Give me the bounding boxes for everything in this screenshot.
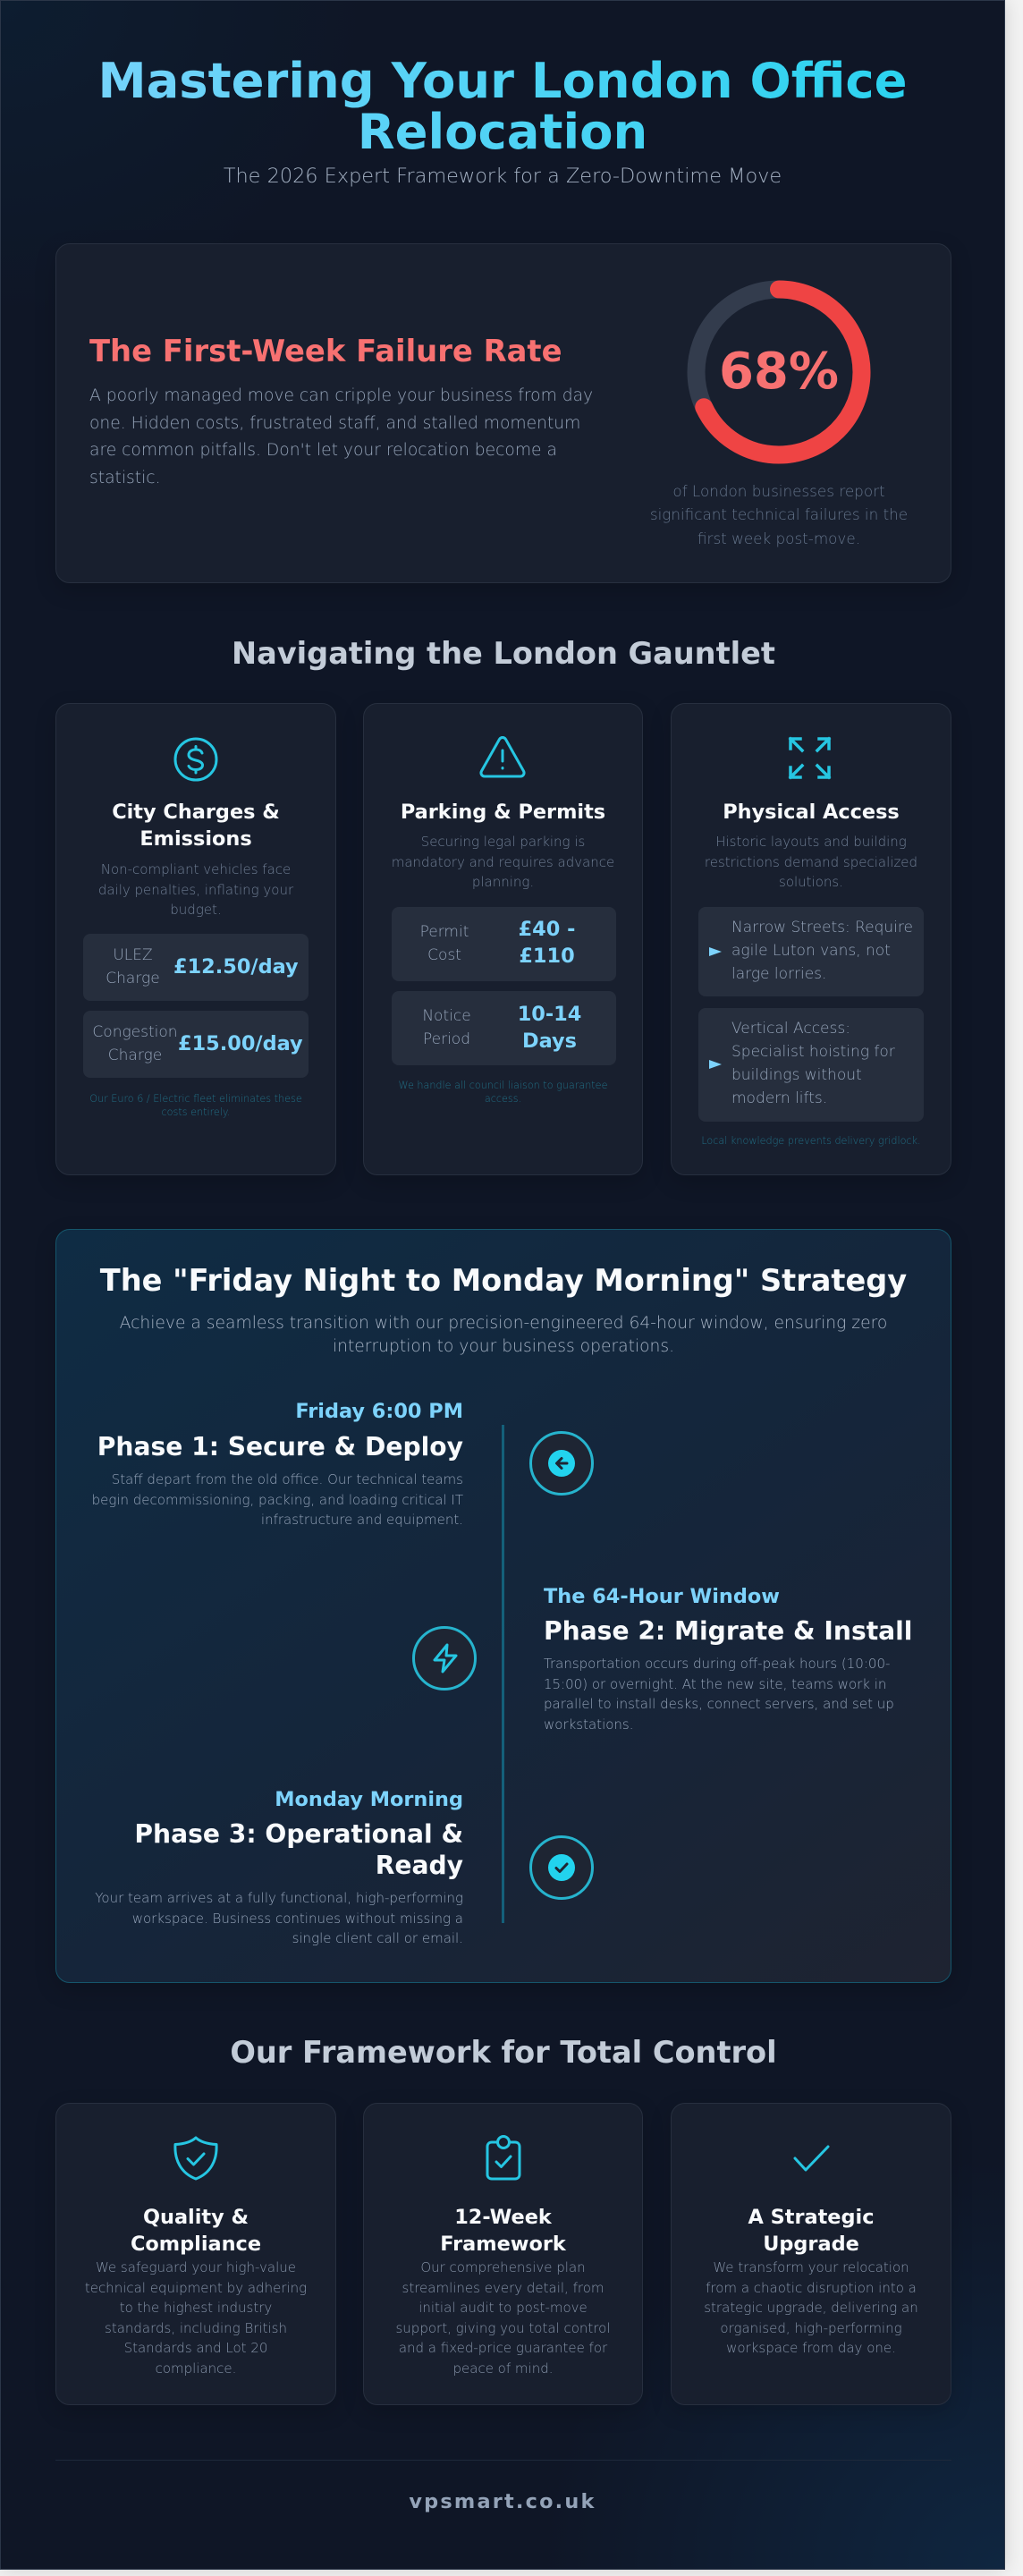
panel: physical access (671, 703, 951, 1175)
subtitle: The 2026 Expert Framework for a Zero-Downtime Move (224, 165, 782, 188)
phase 3 time: Monday Morning (275, 1788, 463, 1811)
card text: Securing legal parking is (421, 834, 585, 850)
footer brand: vpsmart.co.uk (409, 2490, 596, 2513)
title: Relocation (358, 104, 647, 160)
footnote: Local knowledge prevents delivery gridlock. (701, 1135, 921, 1147)
donut caption: significant technical failures in the (650, 505, 908, 523)
panel: Friday to Monday strategy (55, 1229, 951, 1983)
icon: lightning bolt (433, 1644, 458, 1673)
phase 2 text: 15:00) or overnight. At the new site, teams work in (544, 1676, 886, 1692)
strategy text (120, 1314, 887, 1356)
title: Mastering Your London Office (97, 53, 908, 109)
card text: technical equipment by adhering (85, 2280, 307, 2296)
phase 2 time: The 64-Hour Window (544, 1585, 780, 1608)
stat label (92, 1023, 178, 1064)
card text: initial audit to post-move (418, 2300, 588, 2316)
list text (731, 919, 913, 983)
list text: buildings without (731, 1066, 862, 1084)
donut caption: first week post-move. (698, 530, 860, 547)
card heading: A Strategic (748, 2206, 874, 2229)
stat: congestion charge (83, 1011, 309, 1078)
card text: daily penalties, inflating your (98, 882, 293, 898)
icon: dollar coin (173, 737, 218, 782)
card text: organised, high-performing (720, 2320, 902, 2336)
panel: 12-week framework (363, 2103, 643, 2405)
card text: We transform your relocation (713, 2259, 909, 2275)
phase 3 (95, 1788, 594, 1946)
card text: planning. (472, 874, 534, 890)
phase 2 text: workstations. (544, 1716, 634, 1733)
phase 1 (92, 1400, 594, 1528)
stat label: Congestion (92, 1023, 178, 1041)
card heading: 12-Week (454, 2206, 552, 2229)
card heading: Compliance (131, 2233, 261, 2256)
phase 1 text (92, 1471, 463, 1528)
phase 3 text: Your team arrives at a fully functional, high-performing (95, 1890, 463, 1906)
heading: gauntlet: Navigating the London Gauntlet (232, 636, 775, 671)
card text: Standards and Lot 20 (124, 2340, 267, 2356)
stat label: ULEZ (113, 946, 153, 964)
card text: Non-compliant vehicles face (101, 861, 291, 877)
card text (392, 834, 614, 890)
phase 3 heading: Phase 3: Operational & (134, 1819, 463, 1849)
card text (705, 834, 917, 890)
card text: from a chaotic disruption into a (706, 2280, 917, 2296)
hero paragraph: are common pitfalls. Don't let your relocation become a (89, 441, 557, 460)
card heading: Physical Access (723, 801, 900, 824)
card text: and a fixed-price guarantee for (399, 2340, 607, 2356)
strategy text: interruption to your business operations. (333, 1337, 674, 1356)
phase 1 text: Staff depart from the old office. Our technical teams (112, 1471, 463, 1487)
stat value: £15.00/day (178, 1032, 303, 1055)
stat label: Permit (420, 923, 469, 941)
footer divider (55, 2460, 951, 2461)
card text: We safeguard your high-value (96, 2259, 296, 2275)
icon: completion node (529, 1835, 594, 1900)
phase 2 text: parallel to install desks, connect servers, and set up (544, 1696, 894, 1712)
card heading (131, 2206, 261, 2256)
icon: clipboard check (486, 2135, 520, 2181)
icon: arrow in circle (548, 1450, 575, 1477)
list item: narrow streets (698, 907, 924, 996)
list text: Narrow Streets: Require (731, 919, 913, 936)
card heading (672, 2204, 951, 2258)
icon: check mark (793, 2145, 830, 2172)
card heading: Parking & Permits (401, 801, 605, 824)
stat label (422, 1007, 471, 1048)
panel: quality and compliance (55, 2103, 336, 2405)
icon: departure node (529, 1431, 594, 1496)
hero paragraph (89, 386, 593, 487)
phase 3 text: workspace. Business continues without missing a (132, 1911, 463, 1927)
card text: strategic upgrade, delivering an (704, 2300, 918, 2316)
stat value: £40 - (519, 918, 575, 941)
list text: agile Luton vans, not (731, 942, 891, 960)
footnote (399, 1080, 607, 1105)
phase 1 heading: Phase 1: Secure & Deploy (97, 1432, 463, 1462)
stat label: Charge (108, 1046, 162, 1064)
title (1, 55, 1004, 157)
heading: framework: Our Framework for Total Control (230, 2035, 777, 2070)
card heading: Emissions (140, 827, 252, 851)
list text: Specialist hoisting for (731, 1043, 895, 1061)
card text: restrictions demand specialized (705, 854, 917, 870)
panel: parking and permits (363, 703, 643, 1175)
icon: warning triangle (479, 736, 526, 778)
footnote: access. (485, 1093, 521, 1105)
bullet arrow (709, 1060, 722, 1069)
panel: first-week failure rate (55, 243, 951, 583)
icon: lightning node (412, 1626, 477, 1690)
card text: standards, including British (105, 2320, 287, 2336)
phase 3 text (95, 1890, 463, 1946)
list text: large lorries. (731, 965, 826, 983)
card text: compliance. (156, 2360, 236, 2377)
bullet arrow (709, 947, 722, 956)
stat label (106, 946, 160, 987)
footnote: Our Euro 6 / Electric fleet eliminates these (89, 1093, 302, 1105)
stat: permit cost (392, 907, 616, 981)
footnote (89, 1093, 302, 1118)
phase 3 text: single client call or email. (292, 1930, 463, 1946)
list text: Vertical Access: (731, 1020, 850, 1038)
phase 2 (412, 1585, 912, 1733)
phase 1 time: Friday 6:00 PM (295, 1400, 463, 1423)
panel: city charges (55, 703, 336, 1175)
card heading: Framework (440, 2233, 566, 2256)
card text: to the highest industry (120, 2300, 272, 2316)
card heading: Quality & (143, 2206, 249, 2229)
card heading (440, 2206, 567, 2256)
stat: ULEZ charge (83, 934, 309, 1001)
card text: support, giving you total control (395, 2320, 610, 2336)
card text (85, 2259, 307, 2377)
card text (395, 2259, 610, 2377)
stat label: Charge (106, 970, 160, 987)
strategy heading: The "Friday Night to Monday Morning" Strategy (100, 1263, 907, 1298)
hero heading: The First-Week Failure Rate (89, 334, 562, 369)
list text (731, 1020, 895, 1107)
stat value: 10-14 (518, 1003, 581, 1026)
stat value (518, 1003, 581, 1053)
hero paragraph: one. Hidden costs, frustrated staff, and stalled momentum (89, 413, 580, 433)
footnote: We handle all council liaison to guarantee (399, 1080, 607, 1091)
stat label (420, 923, 469, 964)
donut chart: 68% (687, 281, 871, 463)
timeline line (502, 1425, 504, 1923)
stat value (519, 918, 575, 968)
card heading: City Charges & (112, 801, 280, 824)
card heading (112, 801, 280, 851)
stat value: Days (522, 1030, 577, 1053)
card text: Our comprehensive plan (420, 2259, 586, 2275)
panel: strategic upgrade (671, 2103, 951, 2405)
phase 3 heading: Ready (376, 1850, 463, 1880)
stat: notice period (392, 991, 616, 1065)
card text: Historic layouts and building (715, 834, 907, 850)
footnote: costs entirely. (161, 1106, 231, 1118)
stat label: Period (423, 1030, 470, 1048)
phase 2 text (544, 1656, 894, 1733)
phase 2 heading: Phase 2: Migrate & Install (544, 1616, 912, 1646)
donut caption: of London businesses report (672, 482, 885, 500)
donut value: 68% (719, 343, 839, 401)
card text: solutions. (779, 874, 843, 890)
stat value: £110 (519, 945, 575, 968)
phase 1 text: begin decommissioning, packing, and loading critical IT (92, 1492, 463, 1508)
card text: budget. (170, 902, 222, 918)
card heading: Upgrade (763, 2233, 859, 2256)
icon: check in circle (548, 1854, 575, 1881)
card text: mandatory and requires advance (392, 854, 614, 870)
stat value: £12.50/day (173, 955, 299, 979)
phase 1 text: infrastructure and equipment. (261, 1512, 463, 1528)
stat label: Cost (427, 946, 461, 964)
strategy text: Achieve a seamless transition with our precision-engineered 64-hour window, ensuring zero (120, 1314, 887, 1333)
donut caption (650, 482, 908, 547)
card text: workspace from day one. (726, 2340, 896, 2356)
list item: vertical access (698, 1008, 924, 1122)
hero paragraph: statistic. (89, 469, 161, 487)
card text (672, 2258, 951, 2359)
phase 3 heading (134, 1819, 463, 1880)
stat label: Notice (422, 1007, 471, 1025)
card text (98, 861, 293, 918)
icon: expand arrows (789, 737, 832, 780)
phase 2 text: Transportation occurs during off-peak hours (10:00- (544, 1656, 890, 1672)
card text: peace of mind. (452, 2360, 553, 2377)
list text: modern lifts. (731, 1089, 827, 1107)
hero paragraph: A poorly managed move can cripple your business from day (89, 386, 593, 405)
card text: streamlines every detail, from (402, 2280, 604, 2296)
icon: shield check (173, 2136, 218, 2181)
